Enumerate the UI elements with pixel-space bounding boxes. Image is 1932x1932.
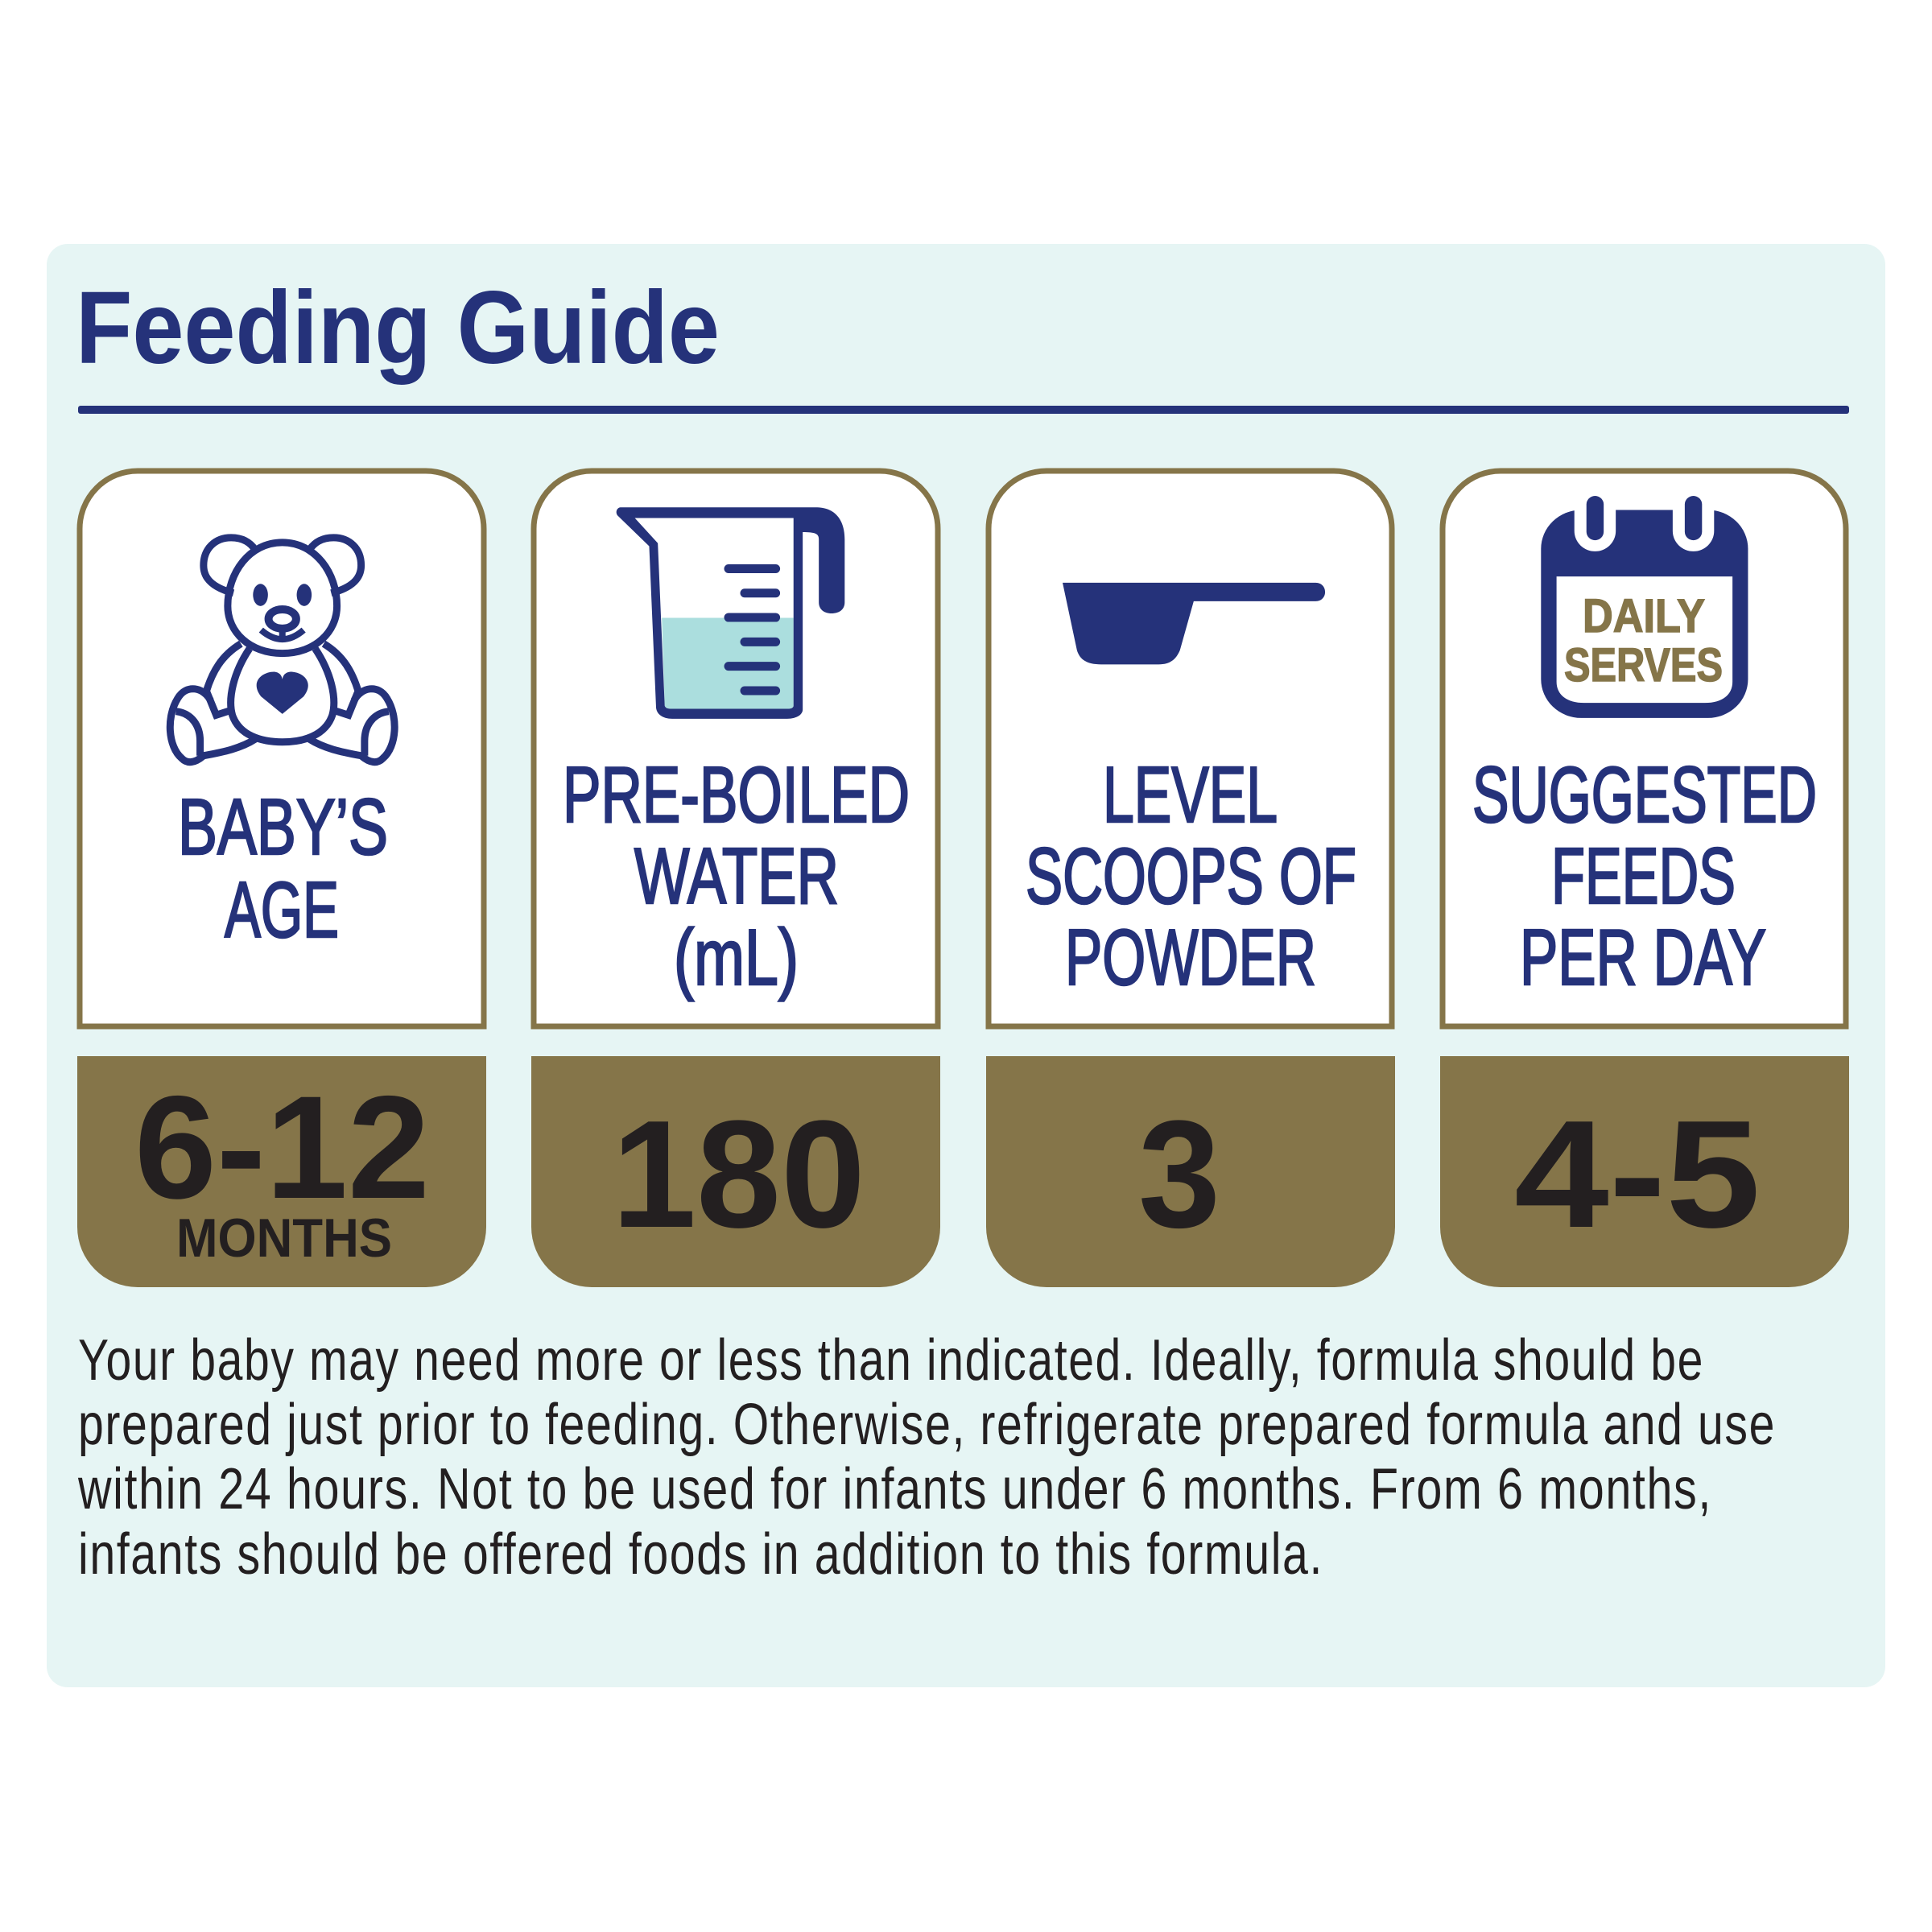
value box: 4-5 xyxy=(1440,1056,1849,1287)
card: baby's age xyxy=(80,471,484,1026)
card: level scoops of powder xyxy=(989,471,1392,1026)
heading: baby's age xyxy=(178,782,388,954)
icon: calendar xyxy=(1541,488,1748,718)
heading: suggested feeds per day: PER DAY xyxy=(1520,913,1766,1001)
heading: level scoops of powder: POWDER xyxy=(1065,913,1316,1001)
title: Feeding Guide xyxy=(76,270,720,386)
value box: 180 xyxy=(531,1056,940,1287)
icon: measuring jug xyxy=(617,507,844,719)
text block: feeding notes: infants should be offered foods in addition to this formula. xyxy=(78,1522,1323,1587)
icon: calendar: SERVES xyxy=(1564,639,1723,691)
icon: scoop xyxy=(1063,583,1325,664)
value box: 3: 3 xyxy=(1138,1089,1220,1260)
heading: baby's age: AGE xyxy=(225,865,339,954)
heading: pre-boiled water: (mL) xyxy=(674,913,799,1001)
heading: level scoops of powder: LEVEL xyxy=(1103,750,1278,839)
heading: pre-boiled water: PRE-BOILED xyxy=(563,750,910,839)
value box: 6-12 months: 6-12 xyxy=(134,1065,430,1229)
value box: 180: 180 xyxy=(612,1089,865,1260)
heading: pre-boiled water xyxy=(563,750,910,1001)
card: pre-boiled water xyxy=(534,471,938,1026)
icon: teddy bear xyxy=(170,538,394,762)
value box: 3 xyxy=(986,1056,1395,1287)
heading: pre-boiled water: WATER xyxy=(634,832,839,920)
value box: 4-5: 4-5 xyxy=(1514,1089,1761,1260)
heading: suggested feeds per day xyxy=(1472,750,1817,1001)
heading: level scoops of powder xyxy=(1026,750,1356,1001)
heading: baby's age: BABY’S xyxy=(178,782,388,871)
value box: 6-12 months xyxy=(77,1056,486,1287)
value box: 6-12 months: MONTHS xyxy=(176,1208,392,1269)
text block: feeding notes xyxy=(77,1328,1776,1587)
panel: feeding guide xyxy=(47,244,1885,1687)
heading: suggested feeds per day: FEEDS xyxy=(1551,832,1736,920)
icon: calendar: DAILY xyxy=(1583,590,1705,642)
card: suggested feeds per day xyxy=(1443,471,1846,1026)
heading: level scoops of powder: SCOOPS OF xyxy=(1026,832,1356,920)
